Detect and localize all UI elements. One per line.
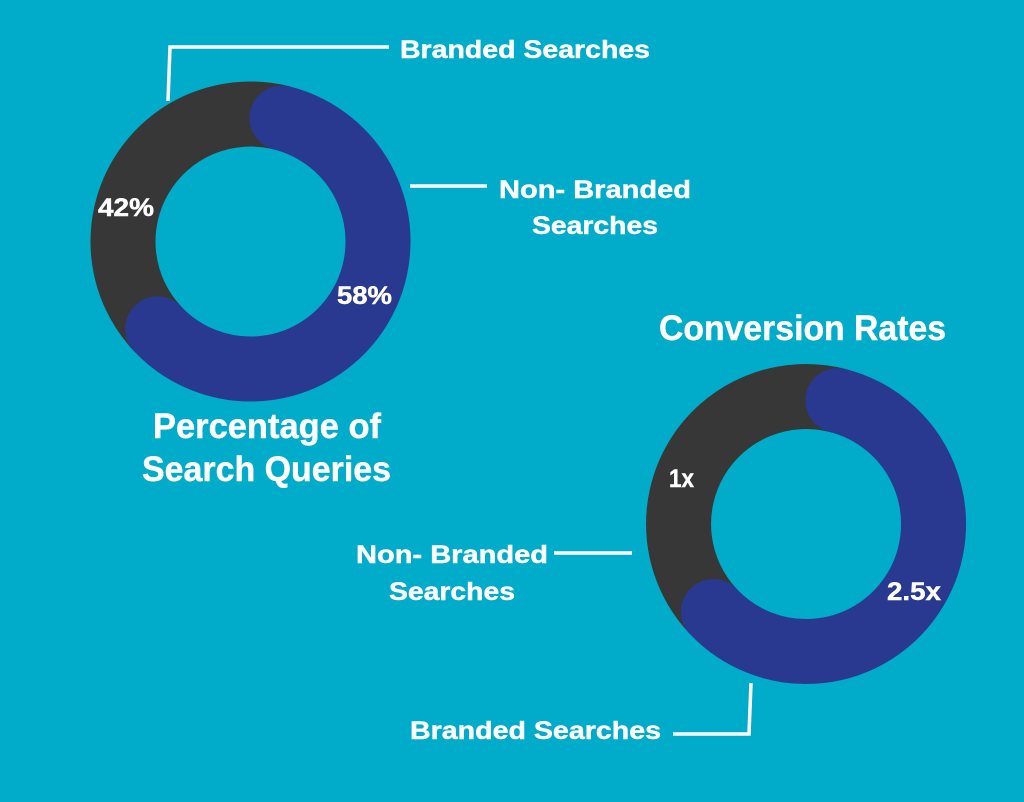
- value label: 1x: 1x: [669, 465, 694, 493]
- label: branded searches, top: Branded Searches: [400, 36, 650, 64]
- leader line: branded searches, top: [168, 47, 389, 101]
- heading: percentage of search queries: Search Queries: [142, 450, 391, 489]
- donut chart: conversion rates: [679, 397, 934, 652]
- leader line: non-branded searches, bottom: [554, 551, 632, 555]
- label: non-branded searches, bottom: Searches: [389, 578, 515, 606]
- value label: 42%: 42%: [98, 194, 154, 222]
- label: non-branded searches, top: Non- Branded: [499, 176, 691, 204]
- label: non-branded searches, bottom: Non- Branded: [356, 541, 548, 569]
- value label: 2.5x: 2.5x: [887, 578, 941, 606]
- label: non-branded searches, top: Searches: [532, 212, 658, 240]
- heading: conversion rates: Conversion Rates: [659, 309, 946, 348]
- heading: percentage of search queries: Percentage of: [153, 407, 381, 446]
- value label: 58%: 58%: [337, 282, 392, 310]
- label: branded searches, bottom: Branded Searches: [410, 717, 661, 745]
- label: non-branded searches, bottom: [356, 541, 548, 606]
- leader line: branded searches, bottom: [673, 683, 751, 734]
- leader line: non-branded searches, top: [410, 184, 487, 188]
- label: non-branded searches, top: [499, 176, 691, 240]
- heading: percentage of search queries: [142, 407, 391, 489]
- donut chart: percentage of search queries: [123, 114, 378, 369]
